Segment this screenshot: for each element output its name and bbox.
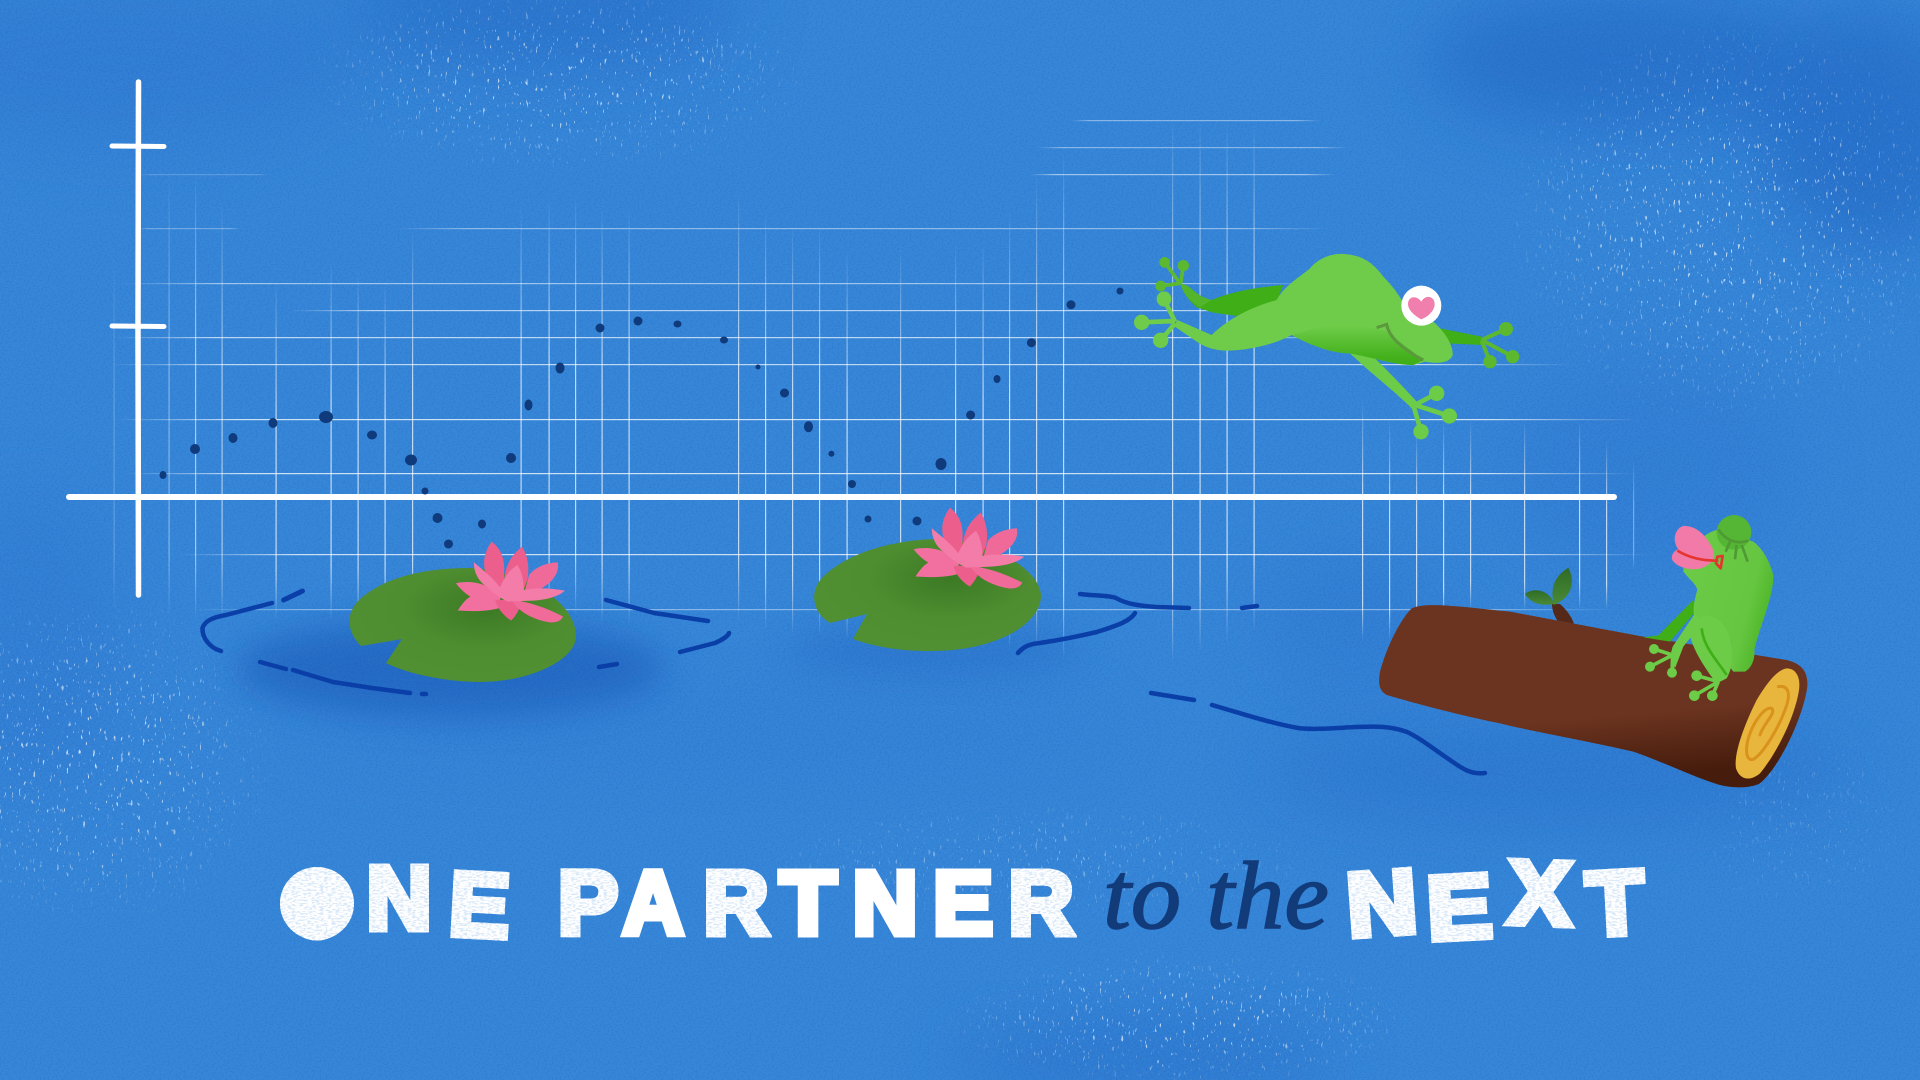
word: PARTNER: T [780,853,836,954]
word: PARTNER: R [1008,854,1074,954]
far front arm [1440,322,1519,368]
word: PARTNER [558,853,1074,954]
log rings [1747,686,1788,760]
y axis with tick marks [112,82,164,595]
word: NEXT [1343,843,1647,959]
belly shading [1292,325,1423,365]
scatter plot: hopping path dots [160,288,1124,558]
closed eye lashes [1718,529,1748,562]
red lip line [1677,551,1723,568]
title: script words to the: to the [1103,842,1329,949]
log [1379,605,1807,787]
left lily pad [349,568,576,682]
word: NEXT: X [1507,843,1573,945]
far arm [1643,600,1697,642]
word: ONE: E [447,855,512,958]
water ripple behind log [1151,693,1485,773]
word: PARTNER: R [704,854,768,954]
word: PARTNER: N [852,854,918,954]
far back leg and foot [1155,257,1283,316]
leaping frog with heart eye [1134,254,1519,439]
near arm and foot [1645,613,1703,678]
water ripples around left lily pad [202,591,729,694]
chart grid [110,118,1650,663]
centre lily pad [814,539,1041,651]
heart pupil [1408,297,1435,319]
title: ONE PARTNER to the NEXT [280,843,1647,959]
word: NEXT: E [1424,855,1494,959]
word: PARTNER: E [933,854,993,954]
log cut face [1736,668,1799,779]
body [1683,530,1773,672]
body [1174,254,1453,365]
thigh and rear foot [1689,616,1732,701]
eye [1401,286,1441,326]
centre water lily flower [914,508,1024,589]
frog sitting on log with big lips [1643,515,1773,701]
mouth [1377,324,1423,360]
word: NEXT: T [1584,852,1647,955]
sprout on log [1525,568,1574,624]
word: NEXT: N [1343,850,1420,956]
word: PARTNER: P [558,854,618,954]
word: ONE: N [366,849,432,949]
word: PARTNER: A [622,853,684,954]
word: ONE: O [287,854,347,955]
near lower leg and foot [1348,352,1457,439]
water ripples around centre lily pad [1018,594,1257,653]
rear foot [1134,291,1175,348]
word: ONE [280,849,512,958]
eye bump [1717,515,1751,550]
kissing lips [1672,526,1714,569]
left water lily flower [456,542,565,623]
x axis [69,494,1614,500]
